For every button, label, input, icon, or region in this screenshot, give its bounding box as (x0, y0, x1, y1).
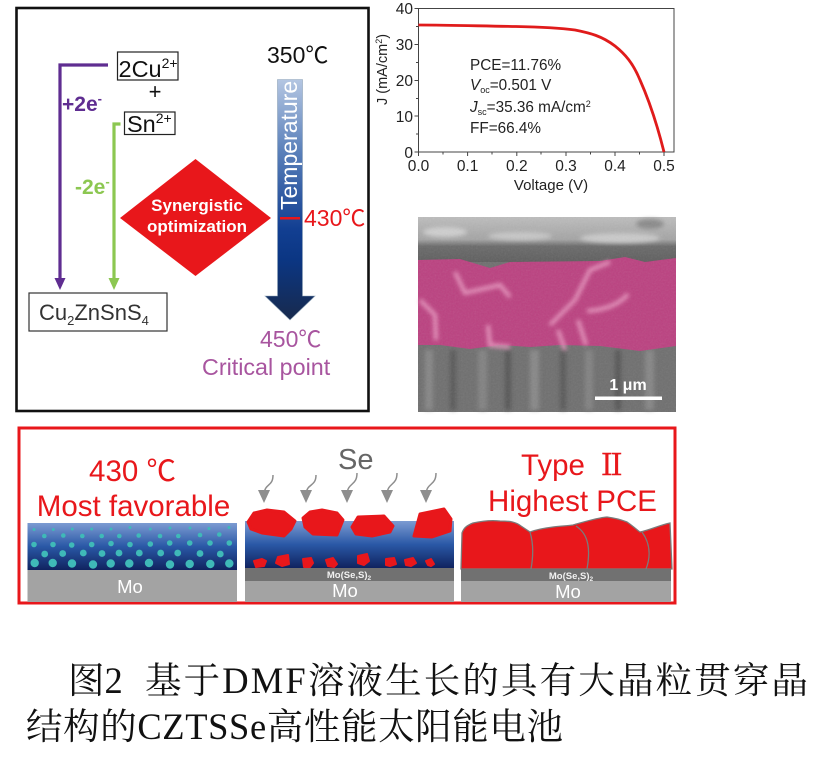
temperature arrow: Temperature (276, 81, 302, 210)
product box: Cu2ZnSnS4 (29, 293, 167, 331)
device parameters: 2 (586, 99, 591, 109)
figure caption: 图2 (68, 660, 123, 701)
diamond: synergistic optimization: Synergistic (151, 196, 243, 215)
device parameters: PCE=11.76% (470, 57, 562, 74)
figure caption (26, 660, 808, 747)
figure caption: 基于DMF溶液生长的具有大晶粒贯穿晶 (145, 660, 808, 701)
product box: Cu2ZnSnS4: 4 (142, 313, 149, 328)
axis tick labels: 0.1 (457, 158, 478, 175)
product box: Cu2ZnSnS4: ZnSnS (74, 300, 142, 325)
image noise (418, 217, 676, 412)
label: Se with arrows (258, 444, 436, 503)
label: 430°C: 430℃ (304, 205, 365, 231)
device parameters: =0.501 V (490, 77, 552, 94)
product box: Cu2ZnSnS4: 2 (67, 313, 74, 328)
axis tick labels: 0 (404, 145, 413, 162)
label: 450°C critical point: 450℃ (260, 326, 321, 352)
large grains (248, 509, 451, 537)
heading: Type II highest PCE (488, 442, 657, 518)
axis tick labels: 30 (396, 37, 413, 54)
sub-panel: precursor film at 430°C (28, 523, 237, 602)
dots (30, 526, 234, 569)
plus sign: + (149, 79, 161, 104)
grain boundary highlights (420, 262, 628, 350)
panel: device evolution strip (19, 428, 675, 603)
axis tick labels: 10 (396, 109, 413, 126)
y axis title: J (mA/cm (375, 44, 391, 105)
axis tick labels: 0.3 (555, 158, 577, 175)
sub-panel: selenization: 2 (368, 575, 372, 582)
sub-panel: final device (461, 517, 672, 602)
heading: 430°C most favorable: Most favorable (37, 490, 230, 523)
label: Se with arrows: Se (338, 444, 373, 476)
arrow: green -2e-: -2e (75, 176, 105, 199)
arrow: green -2e-: - (105, 174, 110, 189)
scale bar: 1 μm (609, 377, 647, 394)
coloured absorber layer (418, 257, 676, 351)
arrow: purple +2e-: +2e (62, 93, 98, 116)
label: 2Cu2+ box: 2+ (162, 55, 178, 71)
curve (418, 25, 664, 152)
axis tick labels: 40 (396, 1, 413, 18)
sub-panel: selenization: Mo(Se,S) (327, 570, 368, 581)
y axis title: 2 (374, 39, 384, 44)
temperature arrow (265, 80, 315, 320)
sub-panel: final device: Mo (555, 581, 581, 602)
sub-panel: selenization: Mo (332, 580, 358, 601)
label: Sn2+ box: 2+ (156, 110, 172, 126)
small grains (254, 554, 434, 567)
SEM cross-section image (418, 217, 676, 412)
axis tick labels (396, 1, 675, 175)
y axis title: ) (375, 34, 391, 39)
device parameters: sc (478, 107, 487, 117)
heading: Type II highest PCE: Type (521, 449, 585, 482)
label: 350°C: 350℃ (267, 42, 328, 68)
x axis title: Voltage (V) (514, 177, 588, 194)
axis tick labels: 0.4 (604, 158, 626, 175)
label: 2Cu2+ box: 2Cu (118, 56, 162, 82)
product box: Cu2ZnSnS4: Cu (39, 300, 67, 325)
heading: Type II highest PCE: Highest PCE (488, 485, 657, 518)
label: Sn2+ box (124, 110, 175, 137)
diamond: synergistic optimization: optimization (147, 217, 247, 236)
sub-panel: final device: 2 (590, 576, 594, 583)
sub-panel: selenization (245, 509, 454, 602)
label: 450°C critical point: Critical point (202, 354, 331, 380)
heading: Type II highest PCE: Ⅱ (597, 442, 627, 484)
axis tick labels: 0.0 (408, 158, 430, 175)
heading: 430°C most favorable: 430 ℃ (89, 455, 176, 488)
device parameters: =35.36 mA/cm (487, 99, 586, 116)
arrow: purple +2e- (54, 65, 108, 290)
label: Sn2+ box: Sn (127, 111, 156, 137)
device parameters: FF=66.4% (470, 120, 541, 137)
axis tick labels: 20 (396, 73, 413, 90)
device parameters: oc (480, 85, 490, 95)
sub-panel: precursor film at 430°C: Mo (117, 576, 143, 597)
device parameters: V (470, 77, 482, 94)
arrow: purple +2e-: - (98, 91, 102, 106)
panel: synergistic optimization schematic (16, 8, 368, 411)
scale bar (595, 377, 662, 400)
heading: 430°C most favorable (37, 455, 230, 523)
label: 450°C critical point (202, 326, 331, 380)
arrow: green -2e- (75, 124, 120, 290)
chart: J-V curve (374, 1, 675, 194)
diamond: synergistic optimization (120, 159, 271, 276)
axis tick labels: 0.2 (506, 158, 528, 175)
label: 2Cu2+ box (118, 52, 178, 82)
figure caption: 结构的CZTSSe高性能太阳能电池 (26, 706, 563, 747)
axis tick labels: 0.5 (653, 158, 675, 175)
device parameters: J (469, 99, 478, 116)
device parameters (469, 57, 591, 137)
sub-panel: final device: Mo(Se,S) (549, 571, 590, 582)
